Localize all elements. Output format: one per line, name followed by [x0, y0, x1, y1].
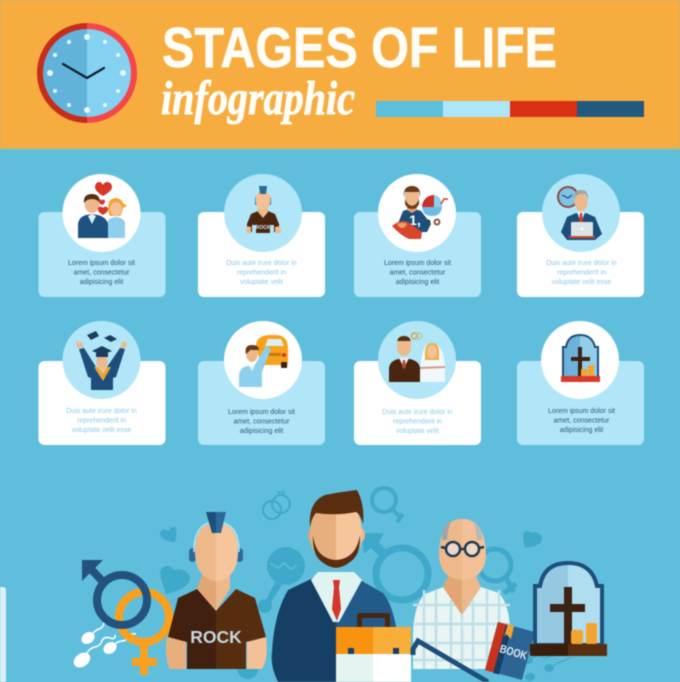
face [310, 500, 336, 569]
tie [332, 580, 341, 621]
panel: stage 5 graduation [38, 321, 166, 445]
panel: stage 8 death [517, 321, 644, 445]
icon: faded male symbol [361, 533, 428, 600]
shirt collar [311, 572, 362, 622]
icon: faded wedding rings [263, 492, 290, 519]
shirt [168, 589, 216, 669]
text block: voluptate velit [240, 279, 283, 286]
text block: Lorem ipsum dolor sit [548, 408, 615, 415]
colour bar [376, 101, 644, 117]
text block: Lorem ipsum dolor sit [384, 260, 451, 267]
icon: faded heart small [160, 527, 176, 542]
text block: Lorem ipsum dolor sit [228, 409, 295, 416]
icon: male symbol [82, 560, 147, 625]
icon: book: BOOK [498, 643, 529, 663]
headphones and halo [189, 548, 196, 562]
text block: Duis aute irure dolor in [546, 260, 617, 267]
arms [166, 636, 186, 669]
head [439, 519, 462, 580]
icon: faded female symbol top [372, 488, 403, 522]
icon: faded heart large [160, 566, 190, 594]
icon: gravestone with cross [561, 335, 600, 382]
panel: stage 4 career [517, 174, 644, 297]
text block: Duis aute irure dolor in [226, 260, 297, 267]
figure: businessman [272, 490, 397, 682]
title: STAGES OF LIFE [162, 16, 557, 80]
panel: stage 6 school [198, 321, 325, 445]
glasses [441, 542, 484, 556]
icon: faded rattle [258, 547, 305, 613]
text block: adipisicing elit [560, 427, 603, 434]
panel: stage 2 teen [198, 174, 325, 297]
text block: reprehenderit in [393, 418, 442, 426]
panel: stage 3 parent [354, 174, 481, 297]
text block: reprehenderit in [237, 270, 286, 276]
icon: briefcase [336, 613, 411, 682]
figure: rock teenager [166, 512, 267, 669]
icon: faded heart bottom [237, 669, 258, 679]
icon: sperm cells [71, 619, 136, 670]
text block: Duis aute irure dolor in [66, 408, 137, 415]
icon: office worker with clock and laptop [558, 187, 602, 240]
ears [308, 528, 316, 542]
header band [0, 0, 680, 150]
text block: adipisicing elit [396, 279, 439, 286]
text block: amet, consectetur [74, 270, 130, 276]
subtitle: infographic [161, 72, 355, 125]
text block: amet, consectetur [554, 418, 610, 424]
text block: amet, consectetur [234, 418, 290, 426]
neck [443, 570, 462, 615]
text block: adipisicing elit [80, 279, 123, 286]
figure: elderly man [413, 519, 510, 669]
background symbols [160, 488, 571, 681]
icon: rocker teen: ROCK [256, 225, 271, 231]
icon: walking cane [413, 641, 488, 682]
icon: book [485, 622, 535, 680]
text block: voluptate velit esse [552, 279, 611, 286]
text block: voluptate velit esse [72, 427, 131, 434]
neck [197, 575, 216, 611]
grey hair [442, 521, 451, 540]
jacket [272, 578, 336, 682]
beard [313, 535, 360, 568]
icon: female symbol [119, 592, 169, 675]
icon: faded sperm [523, 655, 571, 681]
icon: faded female symbol right [479, 549, 516, 593]
head [195, 523, 216, 581]
panel: stage 7 wedding [354, 321, 481, 445]
text block: amet, consectetur [390, 270, 446, 276]
mohawk [206, 512, 216, 533]
plaid shirt [413, 587, 510, 669]
text block: Lorem ipsum dolor sit [68, 260, 135, 267]
text block: adipisicing elit [240, 428, 283, 435]
text block: voluptate velit [396, 428, 439, 435]
icon: couple with hearts [78, 182, 127, 238]
icon: graduate [76, 331, 127, 390]
ROCK label: ROCK [190, 627, 242, 647]
icon: gravestone with cross and coins [530, 563, 607, 656]
icon: bride and groom [389, 333, 445, 382]
icon: person with school bus [239, 335, 288, 387]
text block: Duis aute irure dolor in [382, 409, 453, 416]
hair [310, 490, 363, 527]
icon: wall clock [37, 23, 137, 123]
icon: father with baby and stroller: 1, [409, 212, 421, 228]
text block: reprehenderit in [77, 418, 126, 424]
icon: faded heart right [523, 531, 542, 548]
bottom-left edge panel [0, 587, 6, 682]
panel: stage 1 love [38, 174, 166, 297]
text block: reprehenderit in [557, 270, 606, 276]
